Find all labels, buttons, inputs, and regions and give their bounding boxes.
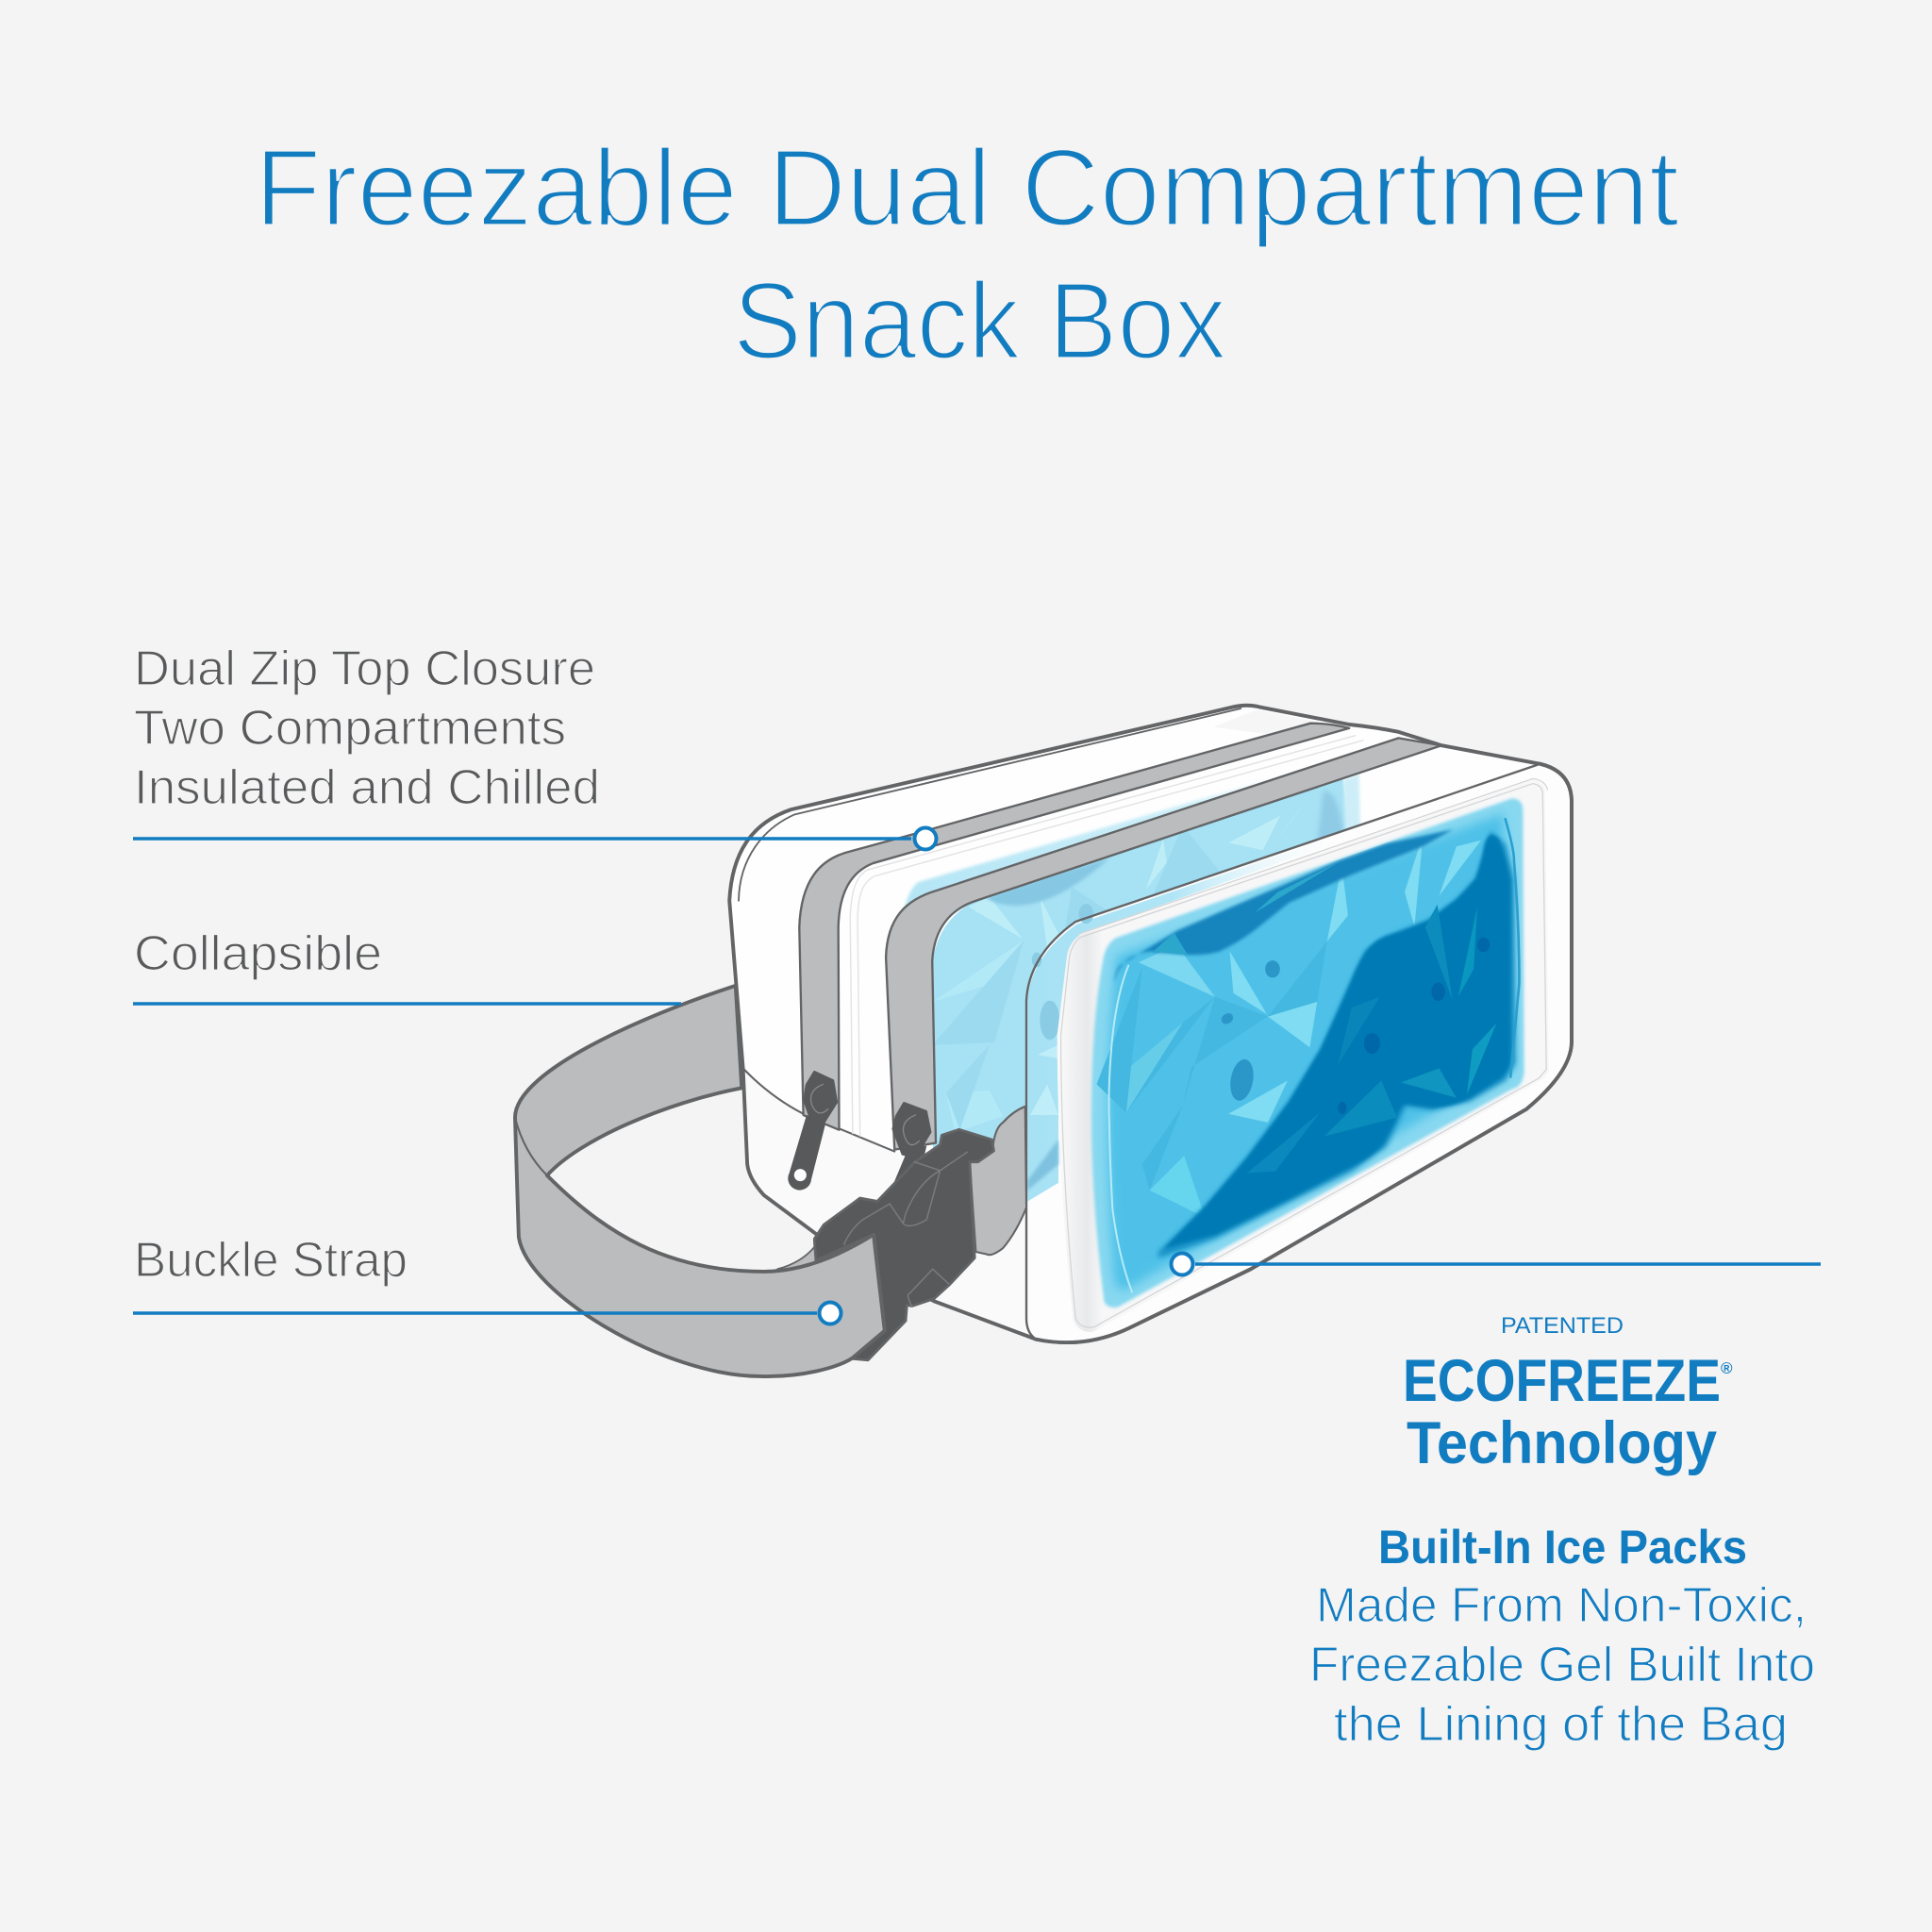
bag outline: [729, 706, 1572, 1342]
ice facets: [1096, 834, 1481, 1217]
ecofreeze heading: ®: [1721, 1359, 1733, 1377]
title: [255, 126, 1679, 382]
front panel left strip showing ice: [1027, 832, 1349, 1201]
seam: [743, 1068, 894, 1152]
rear zipper band: [799, 724, 1349, 1130]
zipper pull two: [883, 1103, 930, 1208]
zipper pull one: [788, 1072, 837, 1191]
ice pack description: Made From Non-Toxic,: [1316, 1578, 1807, 1633]
ice pack description: the Lining of the Bag: [1334, 1697, 1788, 1752]
callout: buckle strap: [133, 1233, 841, 1324]
title: Snack Box: [733, 259, 1226, 382]
callout: dual zip top closure: [133, 641, 936, 849]
ice pack description: [1309, 1521, 1815, 1752]
rear facets: [933, 796, 1309, 1132]
title: Freezable Dual Compartment: [255, 126, 1679, 249]
ice spots dark area: [1338, 938, 1490, 1114]
dark wave glow: [1158, 832, 1516, 1258]
top edge inner line: [739, 708, 1241, 901]
rear ice panel: [932, 779, 1347, 1148]
callout: dual zip top closure: Dual Zip Top Closure: [134, 641, 595, 696]
callout: buckle strap: Buckle Strap: [134, 1233, 408, 1288]
front panel outline: [1026, 764, 1541, 1340]
reflection on top face: [1214, 709, 1343, 740]
rear compartment white rim lines: [850, 736, 1363, 1136]
callout: collapsible: Collapsible: [134, 926, 382, 981]
strap: [515, 986, 885, 1376]
lower body tint: [743, 1068, 1029, 1337]
ecofreeze heading: PATENTED: [1501, 1313, 1624, 1339]
illustration: snack box: [515, 706, 1572, 1376]
strip between zippers: [903, 764, 1321, 924]
rear panel soft right rim: [1343, 774, 1360, 836]
ice pack panel: [1091, 798, 1524, 1307]
ice pack description: Freezable Gel Built Into: [1309, 1638, 1815, 1692]
front zipper band: [886, 738, 1441, 1150]
upper dark band: [1114, 829, 1453, 983]
front panel inner frame: [1058, 780, 1549, 1332]
ice highlight: [1108, 966, 1132, 1291]
dark wave: [1164, 834, 1510, 1248]
front panel outer edge: [1036, 764, 1572, 1342]
callout: dual zip top closure: Two Compartments: [134, 701, 566, 756]
bag body fill: [729, 706, 1572, 1342]
callout line: ice pack: [1172, 1253, 1821, 1275]
ecofreeze heading: ECOFREEZE: [1403, 1348, 1721, 1414]
buckle: [814, 1129, 993, 1360]
right streak: [1506, 819, 1519, 1077]
ecofreeze heading: [1403, 1313, 1733, 1476]
gray right strap segment: [970, 1107, 1026, 1255]
front panel: [1026, 764, 1572, 1342]
wave facets: [1401, 1068, 1457, 1098]
callout: dual zip top closure: Insulated and Chilled: [134, 760, 600, 815]
ice pack description: Built-In Ice Packs: [1378, 1521, 1747, 1574]
ice base: [1108, 813, 1513, 1290]
ecofreeze heading: Technology: [1407, 1410, 1717, 1476]
ice spots light area: [1220, 960, 1280, 1103]
